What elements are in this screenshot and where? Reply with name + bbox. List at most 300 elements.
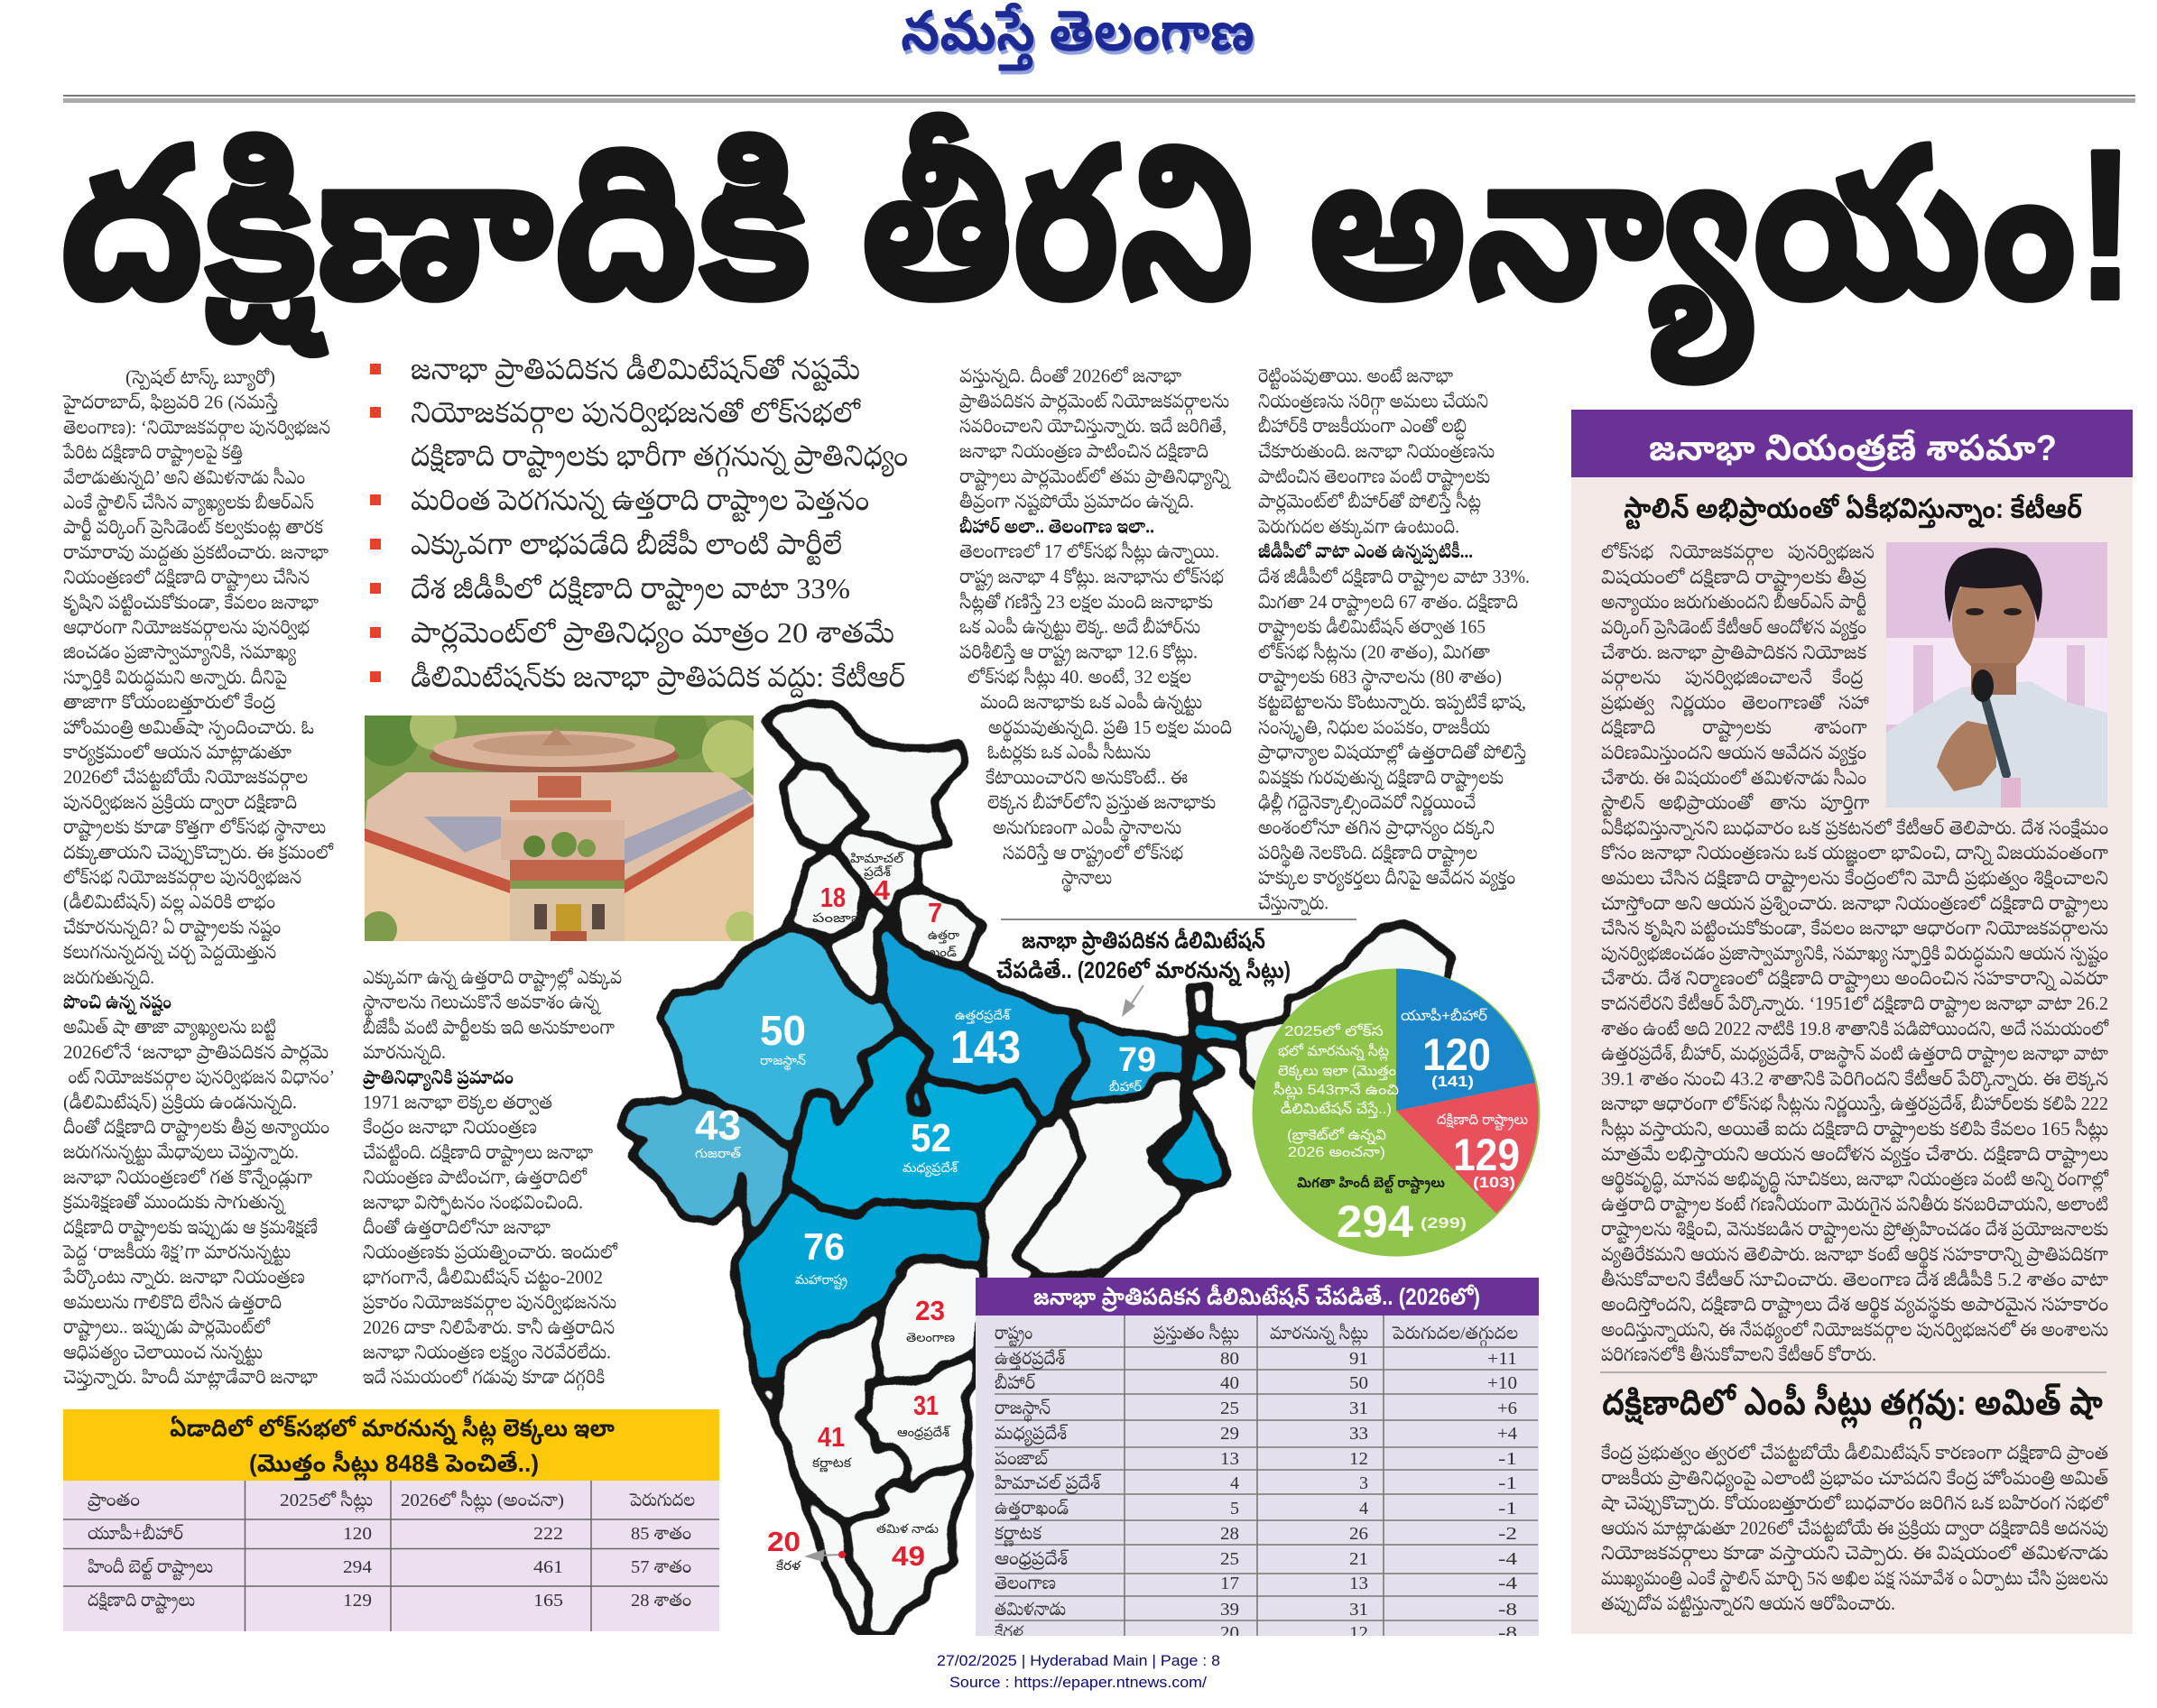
sidebar article: KTR: లోక్‌సభ xyxy=(1601,541,1654,563)
article column 4: రెట్టింపవుతాయి. అంటే జనాభా xyxy=(1258,365,1453,391)
sidebar article: KTR: విషయంలో దక్షిణాది రాష్ట్రాలకు తీవ్ర xyxy=(1601,566,1866,592)
sidebar article: Amit Shah: రాజకీయ ప్రాతినిధ్యంపై ఎలాంటి ప్రభావం చూపదని కేంద్ర హోంమంత్రి అమిత్ xyxy=(1601,1467,2108,1492)
article column 4: పెరుగుదల తక్కువగా ఉంటుంది. xyxy=(1257,515,1459,539)
state seat labels: తమిళ నాడు xyxy=(876,1521,939,1536)
pie chart of seats: 2026 అంచనా) xyxy=(1288,1145,1385,1160)
purple table heading: జనాభా ప్రాతిపదికన డీలిమిటేషన్ చేపడితే.. (2026లో) xyxy=(1033,1283,1480,1312)
article column 1: పొంచి ఉన్న నష్టం xyxy=(63,991,171,1017)
table: state wise delimitation: 31 xyxy=(1349,1399,1368,1418)
article column 3: ప్రాతిపదికన పార్లమెంట్ నియోజకవర్గాలను xyxy=(959,390,1229,415)
state seat labels: ప్రదేశ్ xyxy=(864,864,892,880)
table: state wise delimitation: -2 xyxy=(1498,1524,1517,1544)
pie chart of seats: దక్షిణాది రాష్ట్రాలు xyxy=(1437,1113,1528,1131)
state seat labels: 18 xyxy=(820,882,846,913)
article column 1: రాష్ట్రాలు.. ఇప్పుడు పార్లమెంట్‌లో xyxy=(63,1316,271,1342)
key points bullet list: ఎక్కువగా లాభపడేది బీజేపీ లాంటి పార్టీలే xyxy=(411,528,842,566)
sidebar article: KTR: పునర్విభజించాలనే xyxy=(1685,667,1812,690)
article column 1: జరుగుతున్నది. xyxy=(63,966,154,990)
main headline xyxy=(60,106,2134,383)
state seat labels: ఉత్తరా xyxy=(928,928,959,944)
sidebar article: KTR: శాపంగా xyxy=(1814,716,1867,738)
article column 1: జరుగనున్నట్టు మేధావులు చెప్తున్నారు. xyxy=(63,1141,299,1167)
article column 2 lower: ఎక్కువగా ఉన్న ఉత్తరాది రాష్ట్రాల్లో ఎక్కువ xyxy=(363,966,622,992)
panel: population control sidebar xyxy=(1571,410,2133,1634)
footer source line: Source : https://epaper.ntnews.com/ xyxy=(949,1674,1207,1691)
table: state wise delimitation: 20 xyxy=(1220,1623,1239,1643)
key points bullet list: డీలిమిటేషన్‌కు జనాభా ప్రాతిపదిక వద్దు: కేటీఆర్ xyxy=(411,660,905,698)
state seat labels: 31 xyxy=(913,1389,939,1421)
table: state wise delimitation: రాష్ట్రం xyxy=(995,1324,1032,1347)
sidebar article: KTR: పునర్విభజించడం ప్రజాస్వామ్యానికి, సమాఖ్య స్ఫూర్తికి విరుద్ధమని ఆయన స్పష్టం xyxy=(1601,942,2108,968)
sidebar article: KTR: పరిణమిస్తుందని ఆయన ఆవేదన వ్యక్తం xyxy=(1601,742,1866,767)
article column 1: చేకూరనున్నది? ఏ రాష్ట్రాలకు నష్టం xyxy=(63,916,281,942)
table: state wise delimitation: ఉత్తరప్రదేశ్ xyxy=(995,1349,1066,1371)
table: state wise delimitation: ఉత్తరాఖండ్ xyxy=(995,1499,1069,1520)
article column 4: అంశంలోనూ తగిన ప్రాధాన్యం దక్కని xyxy=(1258,817,1495,842)
state seat labels: 23 xyxy=(915,1295,945,1326)
pie chart of seats: లెక్కలు ఇలా (మొత్తం xyxy=(1278,1064,1396,1081)
table: state wise delimitation: మారనున్న సీట్లు xyxy=(1270,1323,1368,1346)
table: state wise delimitation: 25 xyxy=(1220,1399,1239,1418)
sidebar article: Amit Shah: నియోజకవర్గాలు కూడా వస్తాయని చెప్పారు. ఈ విషయంలో తమిళనాడు xyxy=(1601,1542,2108,1567)
pie chart of seats: (141) xyxy=(1431,1073,1474,1090)
table: seat changes at 848 total: 28 శాతం xyxy=(631,1591,691,1611)
map title xyxy=(996,927,1291,988)
sidebar article: KTR: సీట్లు వస్తాయని, అయితే ఐదు దక్షిణాది రాష్ట్రాలకు కలిపి కేవలం 165 సీట్లు xyxy=(1601,1118,2108,1144)
footer source line: 27/02/2025 | Hyderabad Main | Page : 8 xyxy=(937,1652,1220,1669)
pie chart of seats: 129 xyxy=(1453,1130,1520,1180)
table: state wise delimitation: -8 xyxy=(1498,1600,1517,1620)
state seat labels: ఆంధ్రప్రదేశ్ xyxy=(897,1425,950,1440)
table: seat changes at 848 total: హిందీ బెల్ట్ రాష్ట్రాలు xyxy=(88,1557,213,1581)
sidebar article: KTR: దక్షిణాది xyxy=(1601,716,1655,739)
table: seat changes at 848 total: 85 శాతం xyxy=(631,1524,691,1544)
table: state wise delimitation: పంజాబ్ xyxy=(995,1449,1049,1469)
table: state wise delimitation: హిమాచల్ ప్రదేశ్ xyxy=(995,1473,1101,1494)
article column 4: నియంత్రణను సరిగ్గా అమలు చేయని xyxy=(1258,390,1488,415)
article column 3: ఒక ఎంపీ ఉన్నట్టు లెక్క. అదే బీహార్‌ను xyxy=(959,616,1200,642)
table: state wise delimitation: -4 xyxy=(1498,1549,1517,1569)
table: seat changes at 848 total: 2026లో సీట్లు (అంచనా) xyxy=(401,1490,564,1513)
article column 1: జనాభా నియంత్రణలో గత కొన్నేండ్లుగా xyxy=(63,1166,312,1190)
article column 1: దక్కుతాయని చెప్పుకొచ్చారు. ఈ క్రమంలో xyxy=(63,841,334,864)
masthead rule xyxy=(63,95,2135,103)
article column 1: ఆధిపత్యం చెలాయించ నున్నట్టు xyxy=(63,1341,263,1366)
state seat labels: 43 xyxy=(695,1102,741,1149)
article column 1: ఆధారంగా నియోజకవర్గాలను పునర్విభ xyxy=(63,616,310,642)
pie chart of seats xyxy=(1253,969,1540,1256)
state seat labels: తెలంగాణ xyxy=(906,1330,955,1344)
article column 1: (డీలిమిటేషన్) ప్రక్రియ ఉండనున్నది. xyxy=(63,1091,297,1114)
article column 2 lower: ప్రకారం నియోజకవర్గాల పునర్విభజనను xyxy=(363,1291,616,1316)
article column 2 lower: దీంతో ఉత్తరాదిలోనూ జనాభా xyxy=(363,1216,551,1240)
article column 1: క్రమశిక్షణతో ముందుకు సాగుతున్న xyxy=(63,1191,287,1214)
state seat labels: గుజరాత్ xyxy=(695,1146,741,1160)
article column 4: హక్కుల కార్యకర్తలు దీనిపై ఆవేదన వ్యక్తం xyxy=(1258,867,1515,892)
table: state wise delimitation: 3 xyxy=(1359,1473,1368,1493)
article column 3: అర్థమవుతున్నది. ప్రతి 15 లక్షల మంది xyxy=(988,716,1232,743)
pie chart of seats: భలో మారనున్న సీట్ల xyxy=(1278,1043,1389,1061)
article column 2 lower: జనాభా నియంత్రణ లక్ష్యం నెరవేరలేదు. xyxy=(363,1341,611,1368)
table: seat changes at 848 total: పెరుగుదల xyxy=(629,1491,695,1510)
article column 4: రాష్ట్రాలకు 683 స్థానాలను (80 శాతం) xyxy=(1258,666,1502,692)
photo: speaker with microphone xyxy=(1886,542,2107,808)
sidebar article: KTR: అభిప్రాయంతో xyxy=(1659,792,1754,815)
article column 2 lower: నియంత్రణకు ప్రయత్నించారు. ఇందులో xyxy=(363,1242,618,1265)
article column 1: రాష్ట్రాలకు కూడా కొత్తగా లోక్‌సభ స్థానాలు xyxy=(63,817,326,843)
state seat labels: 4 xyxy=(874,874,891,906)
article column 3: లోక్‌సభ సీట్లు 40. అంటే, 32 లక్షల xyxy=(967,666,1191,690)
pie chart of seats: (299) xyxy=(1421,1214,1467,1232)
sidebar article: KTR: నియోజకవర్గాల xyxy=(1670,541,1773,567)
divider above map title xyxy=(1001,919,1356,920)
table: state wise delimitation xyxy=(976,1278,1553,1647)
article column 4: జీడీపీలో వాటా ఎంత ఉన్నప్పటికీ... xyxy=(1258,540,1473,565)
article column 1: లోక్‌సభ నియోజకవర్గాల పునర్విభజన xyxy=(63,866,301,891)
sidebar article: KTR: పరిగణనలోకి తీసుకోవాలని కేటీఆర్ కోరారు. xyxy=(1601,1343,1876,1365)
sidebar article: Amit Shah: కేంద్ర ప్రభుత్వం త్వరలో చేపట్టబోయే డీలిమిటేషన్ కారణంగా దక్షిణాది ప్రాంత xyxy=(1601,1442,2108,1467)
sidebar article: KTR: వర్కింగ్ ప్రెసిడెంట్ కేటీఆర్ ఆందోళన వ్యక్తం xyxy=(1601,616,1866,642)
state seat labels: హిమాచల్ xyxy=(850,851,905,865)
article column 3: రాష్ట్ర జనాభా 4 కోట్లు. జనాభాను లోక్‌సభ xyxy=(959,566,1224,592)
state seat labels: 41 xyxy=(818,1421,845,1453)
table: state wise delimitation: 29 xyxy=(1220,1424,1239,1444)
pie chart of seats: (103) xyxy=(1473,1174,1515,1191)
article column 4: చేస్తున్నారు. xyxy=(1258,891,1328,915)
article column 1: స్ఫూర్తికి విరుద్ధమని అన్నారు. దీనిపై xyxy=(63,666,287,692)
table: state wise delimitation: 12 xyxy=(1349,1623,1368,1643)
table: state wise delimitation: -1 xyxy=(1498,1473,1517,1493)
table: state wise delimitation: 13 xyxy=(1220,1449,1239,1469)
sidebar article: KTR: తీసుకోవాలని కేటీఆర్ సూచించారు. తెలంగాణ దేశ జీడీపీకి 5.2 శాతం వాటా xyxy=(1601,1269,2108,1290)
state seat labels: పంజాబ్ xyxy=(812,910,866,925)
sidebar article: KTR: శాతం ఉంటే అది 2022 నాటికి 19.8 శాతానికి పడిపోయిందని, అదే సమయంలో xyxy=(1601,1018,2109,1039)
table: state wise delimitation: +10 xyxy=(1487,1373,1517,1393)
table: seat changes at 848 total: 129 xyxy=(343,1591,372,1611)
sidebar article: KTR: తెలంగాణతో xyxy=(1742,691,1826,713)
arrow to map xyxy=(1122,985,1143,1017)
article column 1: (డీలిమిటేషన్) వల్ల ఎవరికి లాభం xyxy=(63,891,275,916)
table: state wise delimitation: 12 xyxy=(1349,1449,1368,1469)
state seat labels: రాజస్థాన్ xyxy=(760,1053,806,1071)
table: state wise delimitation: 5 xyxy=(1230,1499,1239,1519)
table: seat changes at 848 total: 165 xyxy=(533,1591,563,1611)
sidebar article: KTR: రాష్ట్రాలను శిక్షించి, వెనుకబడిన రాష్ట్రాలను ప్రోత్సహించడం దేశ ప్రయోజనాలకు xyxy=(1601,1218,2108,1244)
table: state wise delimitation: 25 xyxy=(1220,1549,1239,1569)
sidebar article: KTR: స్టాలిన్ xyxy=(1601,792,1645,817)
sidebar article: KTR: అన్యాయం జరుగుతుందని బీఆర్ఎస్ పార్టీ xyxy=(1601,591,1866,616)
yellow table heading: ఏడాదిలో లోక్‌సభలో మారనున్న సీట్ల లెక్కలు ఇలా xyxy=(170,1415,615,1446)
kerala pointer xyxy=(804,1549,846,1562)
pie chart of seats: యూపీ+బీహార్ xyxy=(1401,1008,1488,1024)
table: state wise delimitation: 4 xyxy=(1230,1473,1239,1493)
article column 2 lower: చేపట్టింది. దక్షిణాది రాష్ట్రాలు జనాభా xyxy=(363,1141,593,1168)
state seat labels: 79 xyxy=(1118,1041,1156,1079)
sidebar article: KTR: కోసం జనాభా నియంత్రణను ఒక యజ్ఞంలా భావించి, దాన్ని విజయవంతంగా xyxy=(1601,842,2108,867)
table: state wise delimitation: 40 xyxy=(1220,1373,1239,1393)
article column 2 lower: ఇదే సమయంలో గడువు కూడా దగ్గరికి xyxy=(363,1366,605,1391)
masthead logo: నమస్తే తెలంగాణ xyxy=(901,1,1254,71)
map of India with projected seats xyxy=(620,704,1453,1648)
sidebar article: KTR: సహా xyxy=(1838,691,1869,713)
article column 1: కృషిని పట్టించుకోకుండా, కేవలం జనాభా xyxy=(63,591,319,616)
table: state wise delimitation: పెరుగుదల/తగ్గుదల xyxy=(1392,1324,1518,1346)
key points bullet list: పార్లమెంట్‌లో ప్రాతినిధ్యం మాత్రం 20 శాతమే xyxy=(411,616,894,654)
table: state wise delimitation: మధ్యప్రదేశ్ xyxy=(995,1424,1068,1446)
article column 1: నియంత్రణలో దక్షిణాది రాష్ట్రాలు చేసిన xyxy=(63,567,310,592)
sidebar title: జనాభా నియంత్రణే శాపమా? xyxy=(1649,429,2057,472)
article column 1: ంట్ నియోజకవర్గాల పునర్విభజన విధానం’ xyxy=(63,1066,335,1092)
main headline: తీరని xyxy=(861,106,1254,343)
sidebar article: KTR: ఆర్థికవృద్ధి, మానవ అభివృద్ధి సూచికలు, జనాభా నియంత్రణ వంటి అన్ని రంగాల్లో xyxy=(1601,1168,2109,1195)
article column 1: పునర్విభజన ప్రక్రియ ద్వారా దక్షిణాది xyxy=(63,791,297,815)
article column 1 xyxy=(62,366,335,1390)
table: seat changes at 848 total: 294 xyxy=(343,1557,372,1577)
article column 2 lower: నియంత్రణ పాటించగా, ఉత్తరాదిలో xyxy=(363,1167,588,1190)
pie chart of seats: 120 xyxy=(1422,1029,1491,1080)
article column 1: అమిత్ షా తాజా వ్యాఖ్యలను బట్టి xyxy=(63,1016,276,1041)
sidebar article: KTR: అందిస్తోందని, దక్షిణాది రాష్ట్రాలు దేశ ఆర్థిక వ్యవస్థకు అపారమైన సహకారం xyxy=(1601,1294,2108,1320)
table: seat changes at 848 total: ప్రాంతం xyxy=(87,1491,140,1511)
table: state wise delimitation: 39 xyxy=(1220,1600,1239,1620)
key points bullet list xyxy=(370,353,908,698)
article column 1: ఎంకే స్టాలిన్ చేసిన వ్యాఖ్యలకు బీఆర్ఎస్ xyxy=(63,491,314,516)
table: state wise delimitation: -4 xyxy=(1498,1574,1517,1593)
article column 4: ఢిల్లీ గద్దెనెక్కాల్సిందెవరో నిర్ణయించే xyxy=(1258,791,1476,817)
sidebar article: KTR: ఉత్తరప్రదేశ్, బీహార్, మధ్యప్రదేశ్, రాజస్థాన్ వంటి ఉత్తరాది రాష్ట్రాల జనాభా వాటా xyxy=(1601,1043,2108,1069)
article column 1: జించడం ప్రజాస్వామ్యానికి, సమాఖ్య xyxy=(63,642,297,667)
state seat labels: 52 xyxy=(911,1116,951,1160)
pie chart of seats: (బ్రాకెట్‌లో ఉన్నవి xyxy=(1287,1127,1386,1145)
sidebar article: KTR: కాదనలేరని కేటీఆర్ పేర్కొన్నారు. ‘1951లో దక్షిణాది రాష్ట్రాల జనాభా వాటా 26.2 xyxy=(1601,992,2108,1019)
article column 1: 2026లో చేపట్టబోయే నియోజకవర్గాల xyxy=(63,766,308,791)
article column 3: రాష్ట్రాలు పార్లమెంట్‌లో తమ ప్రాతినిధ్యాన్ని xyxy=(959,466,1232,491)
article column 4: బీహార్‌కి రాజకీయంగా ఎంతో లబ్ధి xyxy=(1258,415,1467,441)
pie chart of seats: 2025లో లోక్‌స xyxy=(1284,1023,1384,1039)
article column 3: తెలంగాణలో 17 లోక్‌సభ సీట్లు ఉన్నాయి. xyxy=(959,540,1219,565)
state seat labels: బీహార్ xyxy=(1109,1079,1143,1094)
table: state wise delimitation: -1 xyxy=(1498,1449,1517,1469)
table: state wise delimitation: 21 xyxy=(1349,1549,1368,1569)
sidebar article: KTR: కేంద్ర xyxy=(1832,667,1863,689)
article column 4: ప్రాధాన్యాల విషయాల్లో ఉత్తరాదితో పోలిస్తే xyxy=(1258,742,1526,767)
table: state wise delimitation: 80 xyxy=(1220,1349,1239,1369)
table: state wise delimitation: 26 xyxy=(1349,1524,1368,1544)
article column 1: దక్షిణాది రాష్ట్రాలకు ఇప్పుడు ఆ క్రమశిక్షణే xyxy=(63,1216,318,1242)
article column 4: కట్టబెట్టాలను కొంటున్నారు. ఇప్పటికే భాష, xyxy=(1258,691,1526,716)
state seat labels: కర్ణాటక xyxy=(812,1455,852,1473)
sidebar article: KTR: చేశారు. దేశ నిర్మాణంలో దక్షిణాది రాష్ట్రాలు అందించిన సహకారాన్ని ఎవరూ xyxy=(1601,967,2108,993)
masthead logo: నమస్తే తెలంగాణ xyxy=(903,5,1256,75)
article column 1: అమలును గాలికొది లేసిన ఉత్తరాది xyxy=(63,1291,282,1315)
table: state wise delimitation: తమిళనాడు xyxy=(995,1600,1066,1620)
table: state wise delimitation: -8 xyxy=(1498,1623,1517,1643)
table: state wise delimitation: 33 xyxy=(1349,1424,1368,1444)
article column 4: మిగతా 24 రాష్ట్రాలది 67 శాతం. దక్షిణాది xyxy=(1258,591,1518,616)
key points bullet list: జనాభా ప్రాతిపదికన డీలిమిటేషన్‌తో నష్టమే xyxy=(411,353,860,392)
article column 3: లెక్కన బీహార్‌లోని ప్రస్తుత జనాభాకు xyxy=(987,791,1216,815)
article column 2 lower xyxy=(362,966,622,1391)
key points bullet list: నియోజకవర్గాల పునర్విభజనతో లోక్‌సభలో xyxy=(411,396,862,434)
sidebar article: Amit Shah: ముఖ్యమంత్రి ఎంకే స్టాలిన్ మార్చి 5న అఖిల పక్ష సమావేశ ం ఏర్పాటు చేసి ప్రజలను xyxy=(1601,1567,2108,1593)
article column 2 lower: 1971 జనాభా లెక్కల తర్వాత xyxy=(363,1092,552,1115)
table: state wise delimitation: 50 xyxy=(1349,1373,1368,1393)
table: state wise delimitation: తెలంగాణ xyxy=(995,1574,1056,1593)
article column 4: పార్లమెంట్‌లో బీహార్‌తో పోలిస్తే సీట్ల xyxy=(1258,491,1481,515)
sidebar article: KTR: ప్రభుత్వ xyxy=(1601,691,1654,715)
article column 2 lower: ప్రాతినిధ్యానికి ప్రమాదం xyxy=(362,1066,514,1092)
table: seat changes at 848 total: 461 xyxy=(533,1557,563,1577)
article column 3: జనాభా నియంత్రణ పాటించిన దక్షిణాది xyxy=(959,440,1208,463)
article column 4: సంస్కృతి, నిధుల పంపకం, రాజకీయ xyxy=(1258,716,1490,743)
key points bullet list: మరింత పెరగనున్న ఉత్తరాది రాష్ట్రాల పెత్తనం xyxy=(411,484,869,522)
article column 3: సవరించాలని యోచిస్తున్నారు. ఇదే జరిగితే, xyxy=(959,415,1227,439)
state seat labels: 143 xyxy=(950,1021,1021,1073)
article column 1: (స్పెషల్ టాస్క్ బ్యూరో) xyxy=(125,366,275,392)
article column 3: వస్తున్నది. దీంతో 2026లో జనాభా xyxy=(959,365,1181,389)
article column 4: లోక్‌సభ సీట్లను (20 శాతం), మిగతా xyxy=(1258,641,1490,665)
sidebar article: KTR: ఏకీభవిస్తున్నానని బుధవారం ఒక ప్రకటనలో కేటీఆర్ తెలిపారు. దేశ సంక్షేమం xyxy=(1601,817,2108,840)
article column 1: దీంతో దక్షిణాది రాష్ట్రాలకు తీవ్ర అన్యాయం xyxy=(63,1116,329,1142)
key points bullet list: దేశ జీడీపీలో దక్షిణాది రాష్ట్రాల వాటా 33% xyxy=(411,572,850,611)
table: state wise delimitation: బీహార్ xyxy=(995,1373,1036,1393)
sidebar article: KTR: అందిస్తున్నాయని, ఈ నేపథ్యంలో నియోజకవర్గాల పునర్విభజనలో ఈ అంశాలను xyxy=(1601,1318,2108,1343)
article column 2 lower: స్థానాలను గెలుచుకొనే అవకాశం ఉన్న xyxy=(363,992,602,1018)
article column 4: రాష్ట్రాలకు డీలిమిటేషన్ తర్వాత 165 xyxy=(1258,616,1486,642)
map title: జనాభా ప్రాతిపదికన డీలిమిటేషన్ xyxy=(1022,927,1265,956)
table: state wise delimitation: ప్రస్తుతం సీట్లు xyxy=(1153,1323,1239,1346)
article column 4: వివక్షకు గురవుతున్న దక్షిణాది రాష్ట్రాలకు xyxy=(1258,766,1504,792)
photo: new parliament building xyxy=(365,716,754,941)
sidebar article: KTR: వ్యతిరేకమని ఆయన తెలిపారు. జనాభా కంటే ఆర్థిక సహకారాన్ని ప్రాతిపదికగా xyxy=(1601,1243,2108,1269)
article column 3: పరిశీలిస్తే ఆ రాష్ట్ర జనాభా 12.6 కోట్లు. xyxy=(959,641,1198,667)
article column 3 xyxy=(959,365,1232,893)
article column 1: పేరిట దక్షిణాది రాష్ట్రాలపై కత్తి xyxy=(62,441,243,467)
article column 1: హైదరాబాద్, ఫిబ్రవరి 26 (నమస్తే xyxy=(62,392,278,415)
article column 1: కలుగనున్నదన్న చర్చ పెద్దయెత్తున xyxy=(63,941,276,966)
article column 1: పెద్ద ‘రాజకీయ శిక్ష’గా మారనున్నట్టు xyxy=(62,1242,291,1267)
article column 3: మంది జనాభాకు ఒక ఎంపీ ఉన్నట్టు xyxy=(980,691,1202,716)
pie chart of seats: 294 xyxy=(1337,1196,1413,1247)
sidebar subheading: స్టాలిన్ అభిప్రాయంతో ఏకీభవిస్తున్నాం: కేటీఆర్ xyxy=(1624,493,2083,530)
article column 1: తాజాగా కోయంబత్తూరులో కేంద్ర xyxy=(63,691,275,715)
sidebar article: Amit Shah: తప్పుదోవ పట్టిస్తున్నారని ఆయన ఆరోపించారు. xyxy=(1601,1593,1895,1618)
article column 4: దేశ జీడీపీలో దక్షిణాది రాష్ట్రాల వాటా 33%. xyxy=(1258,566,1530,592)
table: state wise delimitation: 4 xyxy=(1359,1499,1368,1519)
sidebar article: KTR: ఉత్తరాది రాష్ట్రాల కంటే గణనీయంగా మెరుగైన పనితీరు కనబరిచాయని, అలాంటి xyxy=(1601,1193,2108,1219)
pie chart of seats: మిగతా హిందీ బెల్ట్ రాష్ట్రాలు xyxy=(1297,1175,1445,1195)
sidebar article: KTR: చూస్తోందా అని ఆయన ప్రశ్నించారు. జనాభా నియంత్రణలో దక్షిణాది రాష్ట్రాలు xyxy=(1601,892,2108,918)
article column 1: పార్టీ వర్కింగ్ ప్రెసిడెంట్ కల్వకుంట్ల తారక xyxy=(63,516,324,541)
article column 3: స్థానాలు xyxy=(1061,867,1112,893)
article column 1: చెప్తున్నారు. హిందీ మాట్లాడేవారి జనాభా xyxy=(63,1366,318,1390)
sidebar article: KTR: జనాభా ఆధారంగా లోక్‌సభ సీట్లను నిర్ణయిస్తే, ఉత్తరప్రదేశ్, బీహార్‌లకు కలిపి 222 xyxy=(1601,1093,2108,1118)
sidebar article: KTR: మాత్రమే లభిస్తాయని ఆయన ఆందోళన వ్యక్తం చేశారు. దక్షిణాది రాష్ట్రాలు xyxy=(1601,1143,2108,1168)
state seat labels: ఉత్తరప్రదేశ్ xyxy=(955,1008,1011,1024)
article column 2 lower: జనాభా విస్ఫోటనం సంభవించింది. xyxy=(363,1191,583,1216)
state seat labels: 50 xyxy=(760,1007,806,1054)
sidebar article: KTR: 39.1 శాతం నుంచి 43.2 శాతానికి పెరిగిందని కేటీఆర్ పేర్కొన్నారు. ఈ లెక్కన xyxy=(1601,1067,2108,1091)
sidebar article: KTR: వర్గాలను xyxy=(1601,667,1661,692)
table: seat changes at 848 total: దక్షిణాది రాష్ట్రాలు xyxy=(88,1591,195,1614)
table: seat changes at 848 total: 57 శాతం xyxy=(631,1557,691,1577)
state seat labels: 49 xyxy=(892,1540,925,1572)
article column 1: వేలాడుతున్నది’ అని తమిళనాడు సీఎం xyxy=(63,466,305,490)
key points bullet list: దక్షిణాది రాష్ట్రాలకు భారీగా తగ్గనున్న ప్రాతినిధ్యం xyxy=(411,439,908,478)
article column 2 lower: మారనున్నది. xyxy=(363,1041,446,1065)
article column 2 lower: భాగంగానే, డీలిమిటేషన్ చట్టం-2002 xyxy=(363,1266,603,1291)
article column 3: అనుగుణంగా ఎంపీ స్థానాలను xyxy=(993,817,1181,843)
sidebar article: Amit Shah: ఆయన మాట్లాడుతూ 2026లో చేపట్టబోయే ఈ ప్రక్రియ ద్వారా దక్షిణాదికి అదనపు xyxy=(1601,1517,2108,1542)
article column 3: కేటాయించారని అనుకొంటే.. ఈ xyxy=(986,766,1188,788)
table: state wise delimitation: ఆంధ్రప్రదేశ్ xyxy=(995,1549,1069,1570)
article column 4: పాటించిన తెలంగాణ వంటి రాష్ట్రాలకు xyxy=(1258,466,1490,491)
table: state wise delimitation: కేరళ xyxy=(995,1623,1024,1643)
article column 4: పరిస్థితి నెలకొంది. దక్షిణాది రాష్ట్రాల xyxy=(1258,842,1477,868)
sidebar article: Amit Shah xyxy=(1601,1442,2109,1618)
article column 1: 2026లోనే ‘జనాభా ప్రాతిపదికన పార్లమె xyxy=(63,1041,329,1066)
article column 1: హోంమంత్రి అమిత్‌షా స్పందించారు. ఓ xyxy=(63,716,314,740)
article column 3: బీహార్ అలా.. తెలంగాణ ఇలా.. xyxy=(959,515,1154,537)
sidebar article: KTR: రాష్ట్రాలకు xyxy=(1702,716,1772,743)
sidebar article: KTR: చేసిన కృషిని పట్టించుకోకుండా, కేవలం జనాభా ఆధారంగా నియోజకవర్గాలను xyxy=(1601,918,2108,943)
state seat labels: 7 xyxy=(928,897,942,928)
table: state wise delimitation: 31 xyxy=(1349,1600,1368,1620)
sidebar article: KTR xyxy=(1601,541,2109,1365)
state seat labels: మహారాష్ట్ర xyxy=(795,1272,847,1290)
state seat labels: 20 xyxy=(767,1526,801,1557)
footer source line xyxy=(937,1652,1220,1691)
table: seat changes at 848 total: 222 xyxy=(533,1524,563,1544)
article column 3: ఓటర్లకు ఒక ఎంపీ సీటును xyxy=(987,742,1151,766)
yellow table heading xyxy=(170,1415,615,1482)
table: state wise delimitation: -1 xyxy=(1498,1499,1517,1519)
pie chart of seats: డీలిమిటేషన్ చేస్తే..) xyxy=(1281,1101,1392,1119)
yellow table heading: (మొత్తం సీట్లు 848కి పెంచితే..) xyxy=(249,1450,539,1482)
article column 1: తెలంగాణ): ‘నియోజకవర్గాల పునర్విభజన xyxy=(63,416,330,441)
pie chart of seats: సీట్లు 543గానే ఉంచి xyxy=(1273,1082,1399,1100)
state seat labels xyxy=(695,851,1156,1573)
table: state wise delimitation: 28 xyxy=(1220,1524,1239,1544)
table: state wise delimitation: రాజస్థాన్ xyxy=(995,1399,1051,1423)
article column 4: చేకూరుతుంది. జనాభా నియంత్రణను xyxy=(1258,440,1495,463)
sidebar article: KTR: అమలు చేసిన దక్షిణాది రాష్ట్రాలను కేంద్రంలోని మోదీ ప్రభుత్వం శిక్షించాలని xyxy=(1601,867,2108,893)
table: seat changes at 848 total: 2025లో సీట్లు xyxy=(280,1490,373,1513)
article column 3: తీవ్రంగా నష్టపోయే ప్రమాదం ఉన్నది. xyxy=(959,491,1194,516)
table: state wise delimitation: +6 xyxy=(1497,1399,1517,1418)
table: seat changes at 848 total: యూపీ+బీహార్ xyxy=(88,1523,184,1544)
state seat labels: 76 xyxy=(803,1225,845,1268)
table: state wise delimitation: 17 xyxy=(1220,1574,1239,1593)
sidebar article: KTR: తాను xyxy=(1770,792,1807,814)
sidebar article: KTR: నిర్ణయం xyxy=(1671,691,1726,716)
sidebar article: KTR: చేశారు. ఈ విషయంలో తమిళనాడు సీఎం xyxy=(1601,767,1866,789)
state seat labels: మధ్యప్రదేశ్ xyxy=(903,1160,958,1177)
state seat labels: కేరళ xyxy=(776,1558,801,1573)
article column 4 xyxy=(1257,365,1530,915)
map title: చేపడితే.. (2026లో మారనున్న సీట్లు) xyxy=(996,956,1291,988)
table: state wise delimitation: +11 xyxy=(1487,1349,1517,1369)
article column 2 lower: 2026 దాకా నిలిపేశారు. కానీ ఉత్తరాదిన xyxy=(363,1316,615,1340)
sidebar article: KTR: చేశారు. జనాభా ప్రాతిపాదికన నియోజక xyxy=(1601,642,1867,664)
sidebar article: KTR: పూర్తిగా xyxy=(1820,792,1870,816)
sidebar article: KTR: పునర్విభజన xyxy=(1788,541,1875,565)
table: state wise delimitation: +4 xyxy=(1497,1424,1517,1444)
article column 1: రామారావు మద్దతు ప్రకటించారు. జనాభా xyxy=(63,541,329,567)
table: state wise delimitation: 13 xyxy=(1349,1574,1368,1593)
table: state wise delimitation: 91 xyxy=(1349,1349,1368,1369)
main headline: దక్షిణాదికి xyxy=(60,106,810,356)
